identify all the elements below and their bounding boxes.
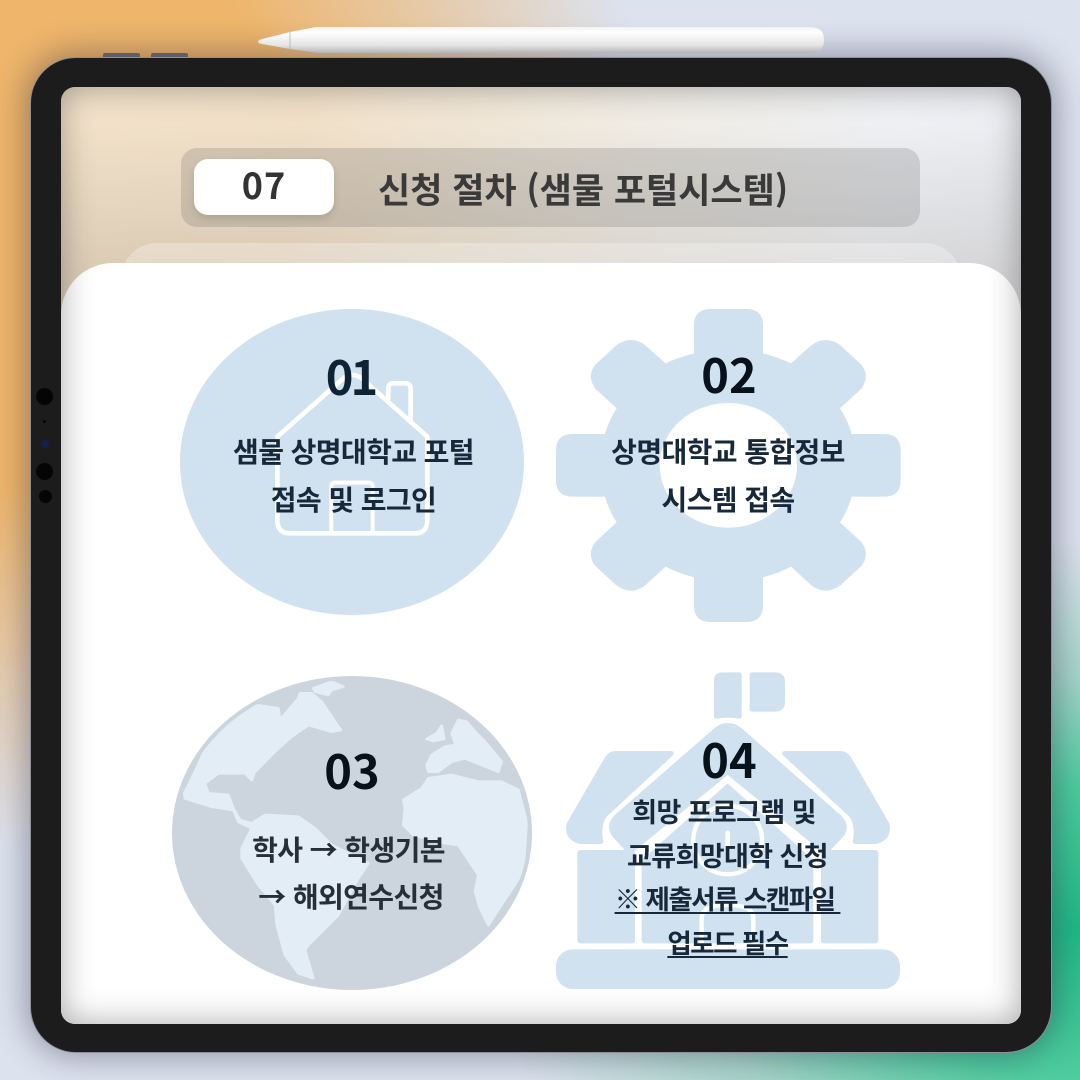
step 02	[556, 309, 901, 622]
text 02: 시스템 접속	[661, 479, 795, 519]
icon: house in circle	[180, 309, 524, 615]
icon: gear	[556, 309, 901, 622]
text 02: 상명대학교 통합정보	[611, 431, 845, 471]
screen	[61, 87, 1021, 1024]
text 01	[233, 431, 474, 519]
icon: globe	[172, 676, 532, 990]
white panel	[61, 263, 1021, 1024]
text 02	[611, 431, 845, 519]
header bar	[181, 148, 920, 227]
apple pencil	[258, 27, 824, 53]
number badge 07	[194, 159, 334, 215]
text 03: → 해외연수신청	[258, 876, 444, 916]
number 01: 01	[326, 340, 375, 409]
tablet top buttons	[103, 53, 188, 57]
step 01	[180, 309, 524, 615]
icon: building	[556, 672, 900, 989]
number 02: 02	[701, 338, 757, 407]
step 04	[556, 672, 900, 989]
back card	[121, 243, 961, 303]
number 03: 03	[324, 734, 380, 803]
text 01: 샘물 상명대학교 포털	[233, 431, 474, 471]
tablet side sensors	[36, 388, 53, 503]
step 03	[172, 676, 532, 990]
text 04: 희망 프로그램 및	[632, 791, 816, 830]
text 04: 교류희망대학 신청	[627, 835, 828, 874]
text 03: 학사 → 학생기본	[252, 829, 445, 869]
text 04	[614, 791, 840, 961]
screen inner shadow	[61, 87, 1021, 1024]
text 04: 업로드 필수	[667, 922, 788, 961]
screen vertical shade	[61, 87, 1021, 1024]
text 01: 접속 및 로그인	[271, 479, 436, 519]
number badge 07: 07	[242, 158, 286, 210]
text 03	[252, 829, 445, 916]
number 04: 04	[701, 723, 757, 792]
title: 신청 절차 (샘물 포털시스템)	[378, 163, 788, 214]
text 04: ※ 제출서류 스캔파일	[615, 878, 834, 917]
